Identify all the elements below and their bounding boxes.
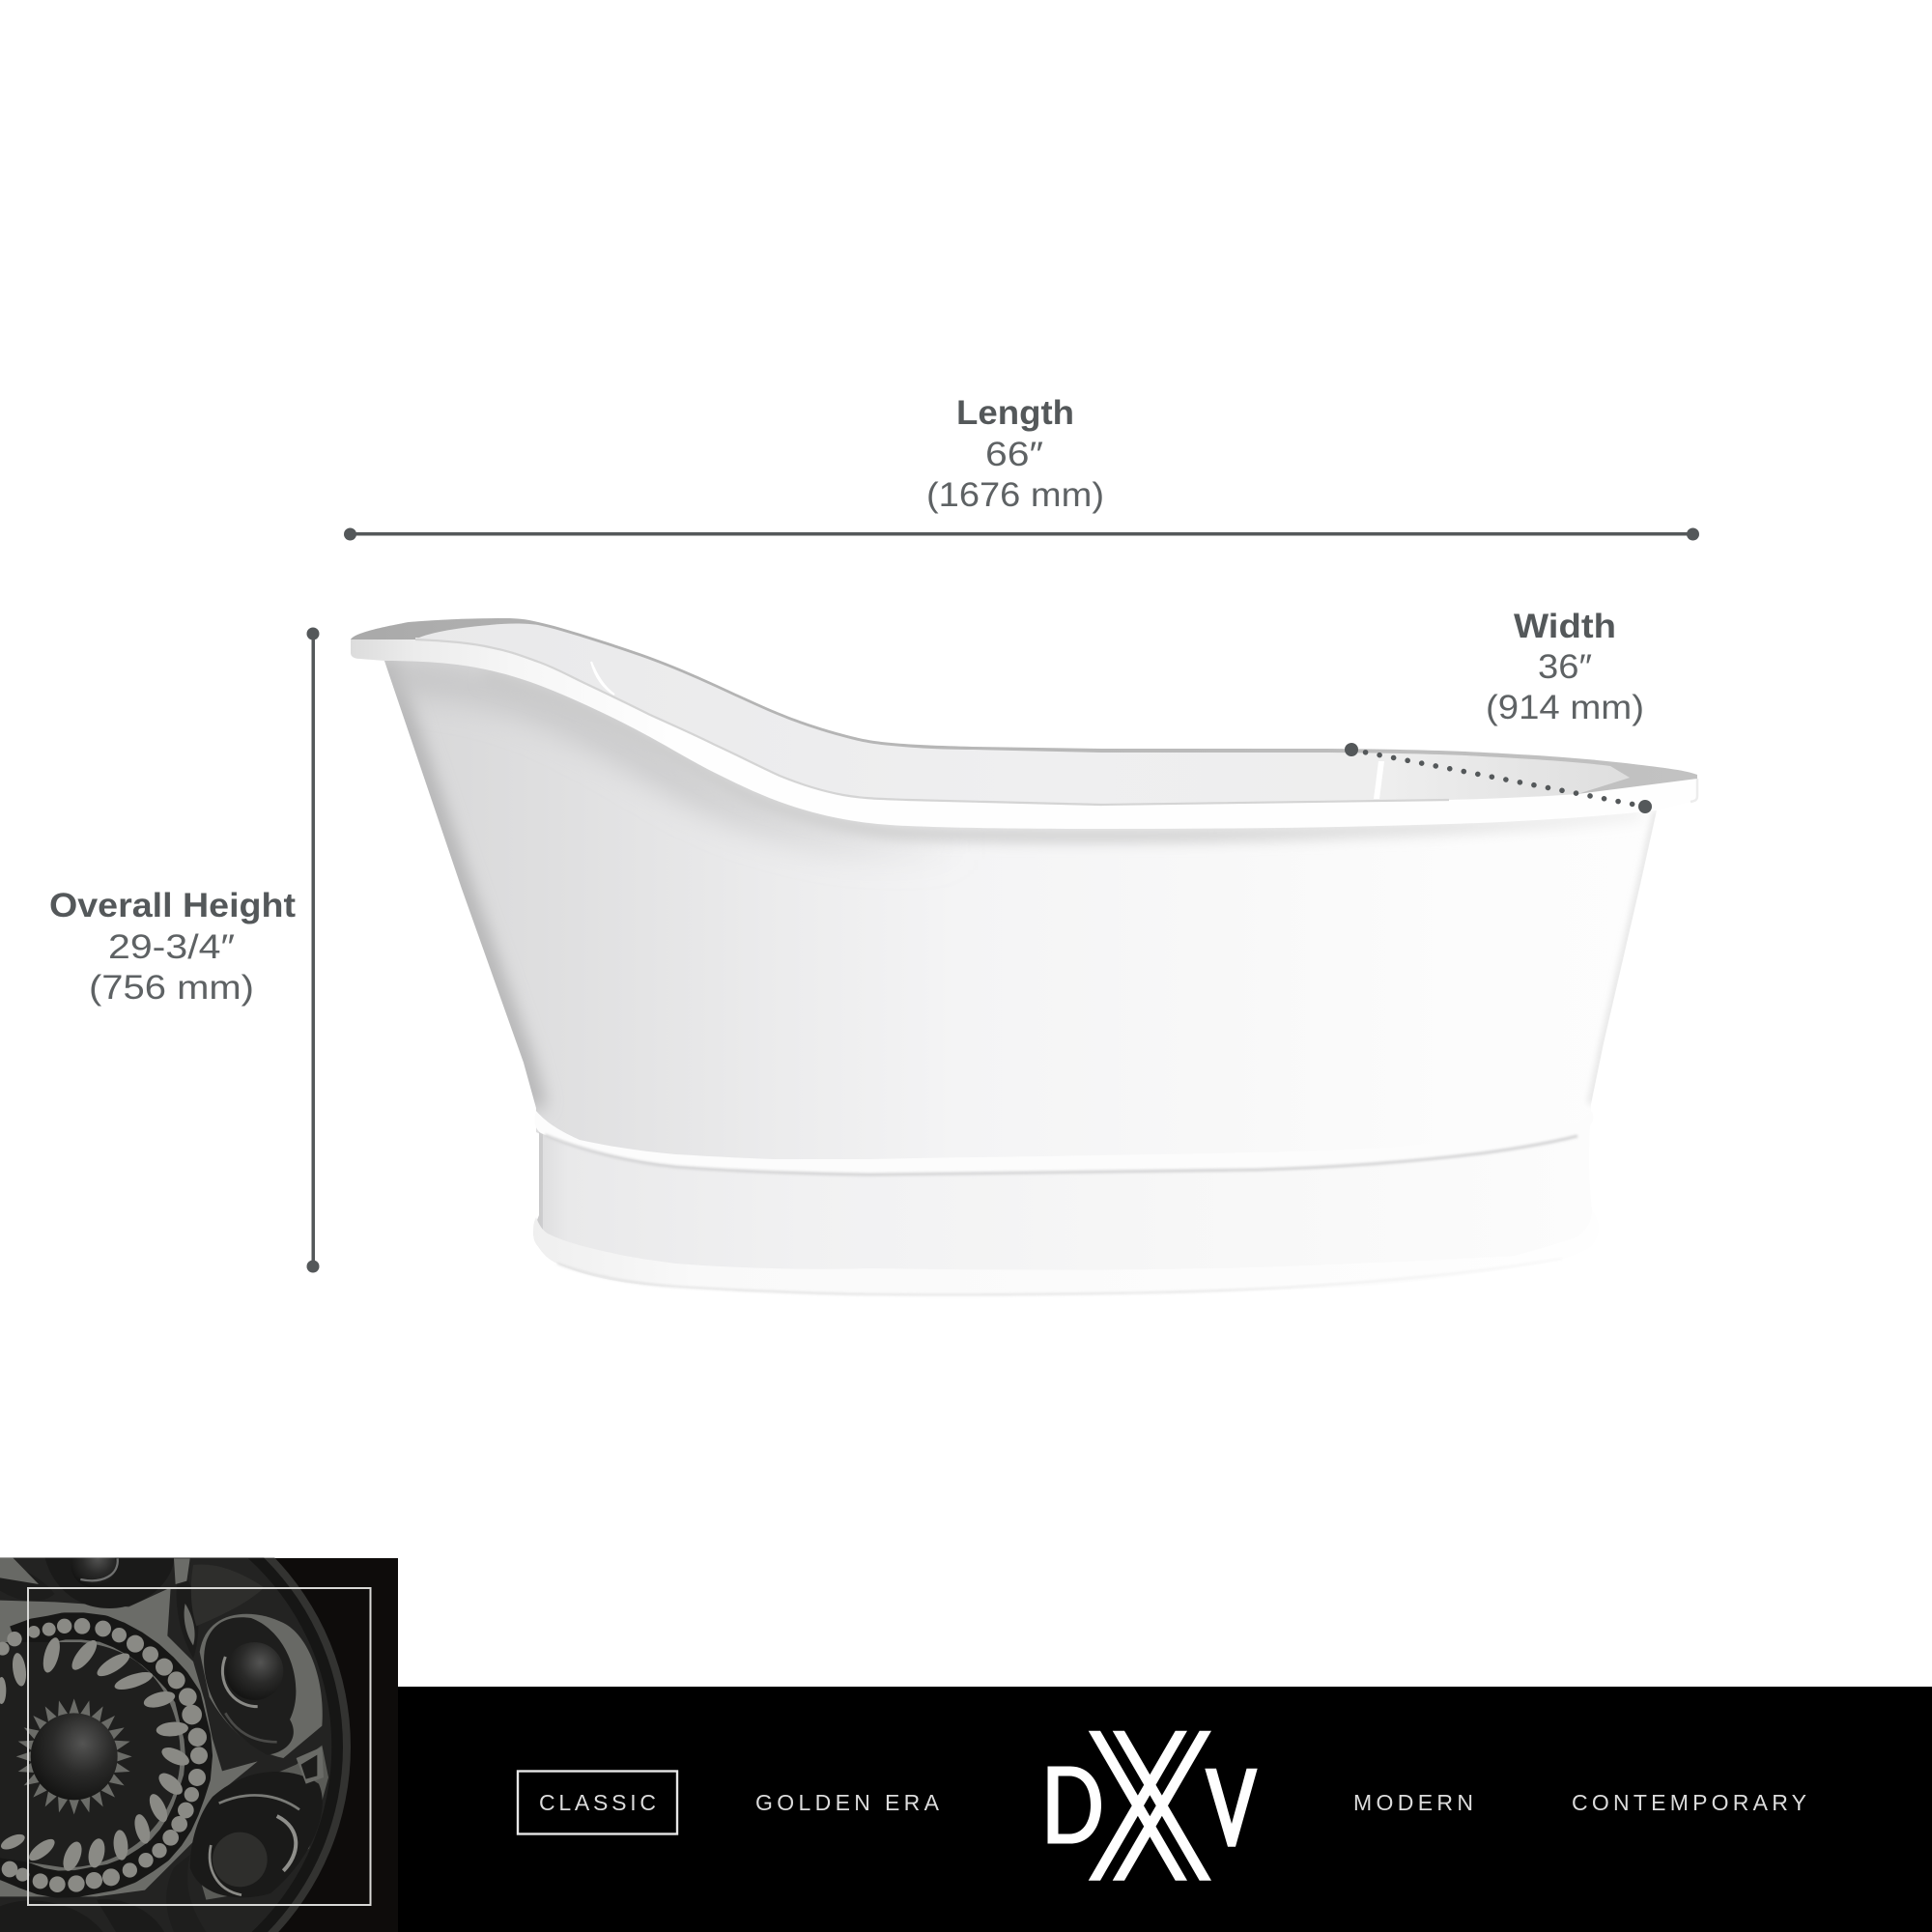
tub body: [384, 657, 1657, 1167]
length dimension line: [344, 527, 1699, 541]
height dimension line: [307, 628, 319, 1273]
ornament image panel: [0, 1557, 398, 1932]
letter D: [1047, 1766, 1101, 1843]
width label: 36″: [1538, 648, 1592, 686]
tub interior: [415, 624, 1630, 805]
overall height label: [49, 887, 296, 1007]
style nav: contemporary: CONTEMPORARY: [1572, 1790, 1806, 1815]
base lip: [533, 1210, 1599, 1294]
interior highlight right: [1374, 761, 1384, 799]
bathtub illustration: [351, 618, 1697, 1304]
letter X stripes: [1089, 1731, 1211, 1881]
overall height label: 29-3/4″: [108, 928, 235, 966]
length label: (1676 mm): [926, 476, 1104, 514]
footer black bar: [398, 1687, 1932, 1932]
width label: Width: [1514, 608, 1616, 645]
width label: (914 mm): [1486, 689, 1644, 726]
ornament frame: [28, 1588, 371, 1905]
interior front groove: [415, 639, 1449, 805]
width dotted dimension line: [1345, 743, 1652, 813]
style nav: classic selected: CLASSIC: [539, 1790, 656, 1815]
letter V: [1205, 1769, 1258, 1847]
length label: 66″: [985, 436, 1043, 473]
base of tub: [533, 1132, 1173, 1269]
DXV logo: [1047, 1731, 1258, 1881]
overall height label: Overall Height: [49, 887, 296, 924]
interior highlight left: [591, 662, 614, 695]
length label: [926, 394, 1104, 514]
length label: Length: [956, 394, 1074, 432]
style nav: golden era: GOLDEN ERA: [755, 1790, 940, 1815]
decorative ring band: [534, 1111, 1593, 1174]
ring shadow: [545, 1135, 1577, 1175]
lip underside shadow: [557, 1259, 1562, 1294]
infographic canvas: [0, 400, 1932, 1932]
style nav: modern: MODERN: [1353, 1790, 1473, 1815]
front rim: [351, 618, 1697, 829]
rim right end shade: [1690, 779, 1697, 802]
body shading: [384, 661, 1657, 1108]
width label: [1486, 608, 1644, 726]
rim top face: [351, 618, 1697, 802]
overall height label: (756 mm): [89, 969, 254, 1007]
style nav: classic selected: [518, 1772, 677, 1833]
